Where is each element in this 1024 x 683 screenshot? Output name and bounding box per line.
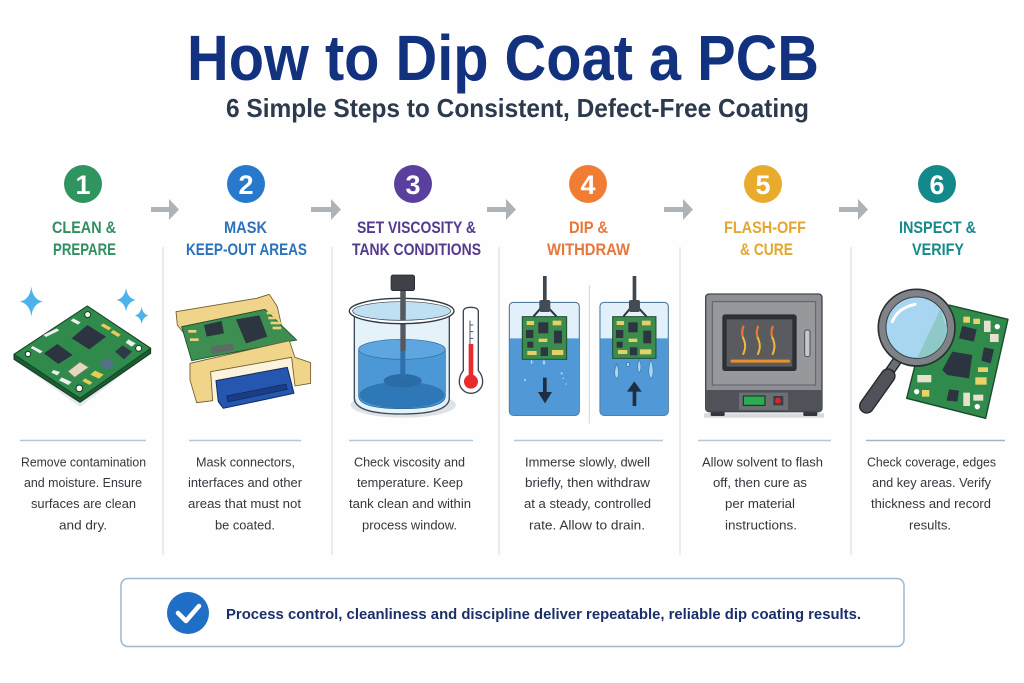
description 5: per material xyxy=(725,497,795,511)
icon: clean circuit board with sparkles xyxy=(14,287,151,407)
badge 4: 4 xyxy=(580,170,596,200)
step 2: mask keep-out areas xyxy=(176,165,311,532)
arrow: step 5 to 6 xyxy=(839,199,868,220)
description 1: and dry. xyxy=(59,518,107,532)
description 6: results. xyxy=(909,518,951,532)
heading 3: SET VISCOSITY & xyxy=(357,218,476,237)
divider 2 xyxy=(189,440,301,442)
badge 2 xyxy=(227,165,265,203)
badge 5 xyxy=(744,165,782,203)
badge 5: 5 xyxy=(755,170,771,200)
description 4: rate. Allow to drain. xyxy=(529,518,645,532)
heading 1: CLEAN & xyxy=(52,218,116,237)
arrow: step 1 to 2 xyxy=(151,199,179,220)
description 2: interfaces and other xyxy=(188,476,302,490)
icon: dipping and withdrawing board in tanks xyxy=(509,276,668,423)
heading 6: INSPECT & xyxy=(899,218,976,237)
heading 4: WITHDRAW xyxy=(547,240,631,259)
heading 2: MASK xyxy=(224,218,268,237)
description 6: thickness and record xyxy=(871,497,991,511)
description 3: tank clean and within xyxy=(349,497,471,511)
badge 1 xyxy=(64,165,102,203)
icon: magnifying glass over circuit board xyxy=(867,289,1008,418)
description 1: surfaces are clean xyxy=(31,497,136,511)
heading 6: VERIFY xyxy=(912,240,965,259)
step 1: clean and prepare xyxy=(14,165,151,532)
description 4: at a steady, controlled xyxy=(524,497,651,511)
description 1: Remove contamination xyxy=(21,456,146,470)
divider 3 xyxy=(349,440,473,442)
heading 5: FLASH-OFF xyxy=(724,218,806,237)
divider 1 xyxy=(20,440,146,442)
description 5: instructions. xyxy=(725,518,797,532)
description 1: and moisture. Ensure xyxy=(24,476,142,490)
divider 5 xyxy=(698,440,831,442)
badge 6 xyxy=(918,165,956,203)
step 4: dip and withdraw xyxy=(509,165,668,532)
badge 3: 3 xyxy=(405,170,421,200)
description 6: and key areas. Verify xyxy=(872,476,992,490)
divider 6 xyxy=(866,440,1005,442)
description 4: briefly, then withdraw xyxy=(525,476,651,490)
subtitle: 6 Simple Steps to Consistent, Defect-Free Coating xyxy=(226,93,809,123)
callout: key takeaway xyxy=(121,578,904,646)
arrow: step 4 to 5 xyxy=(664,199,693,220)
step 6: inspect and verify xyxy=(866,165,1008,532)
heading 3: TANK CONDITIONS xyxy=(352,240,481,259)
heading 1: PREPARE xyxy=(53,240,116,259)
description 6: Check coverage, edges xyxy=(867,456,996,470)
title: How to Dip Coat a PCB xyxy=(187,22,819,94)
arrow: step 2 to 3 xyxy=(311,199,341,220)
heading 5: & CURE xyxy=(740,240,793,259)
heading 2: KEEP-OUT AREAS xyxy=(186,240,307,259)
description 3: temperature. Keep xyxy=(357,476,463,490)
arrow: step 3 to 4 xyxy=(487,199,516,220)
description 3: Check viscosity and xyxy=(354,456,465,470)
callout box xyxy=(121,578,904,646)
step 3: set viscosity and tank conditions xyxy=(349,165,483,532)
icon: masked circuit board with blue connector xyxy=(176,294,311,408)
step 5: flash-off and cure xyxy=(698,165,831,532)
description 5: Allow solvent to flash xyxy=(702,456,823,470)
description 4: Immerse slowly, dwell xyxy=(525,456,650,470)
icon: curing oven xyxy=(704,294,824,418)
description 2: Mask connectors, xyxy=(196,456,295,470)
description 5: off, then cure as xyxy=(713,476,807,490)
description 3: process window. xyxy=(362,518,457,532)
badge 1: 1 xyxy=(75,170,91,200)
description 2: be coated. xyxy=(215,518,275,532)
heading 4: DIP & xyxy=(569,218,608,237)
divider 4 xyxy=(514,440,663,442)
badge 6: 6 xyxy=(929,170,945,200)
badge 4 xyxy=(569,165,607,203)
badge 2: 2 xyxy=(238,170,254,200)
icon: check mark xyxy=(167,592,209,634)
description 2: areas that must not xyxy=(188,497,302,511)
callout text: Process control, cleanliness and discipline deliver repeatable, reliable dip coating results. xyxy=(226,606,861,623)
badge 3 xyxy=(394,165,432,203)
icon: beaker with stirrer and thermometer xyxy=(349,275,483,418)
